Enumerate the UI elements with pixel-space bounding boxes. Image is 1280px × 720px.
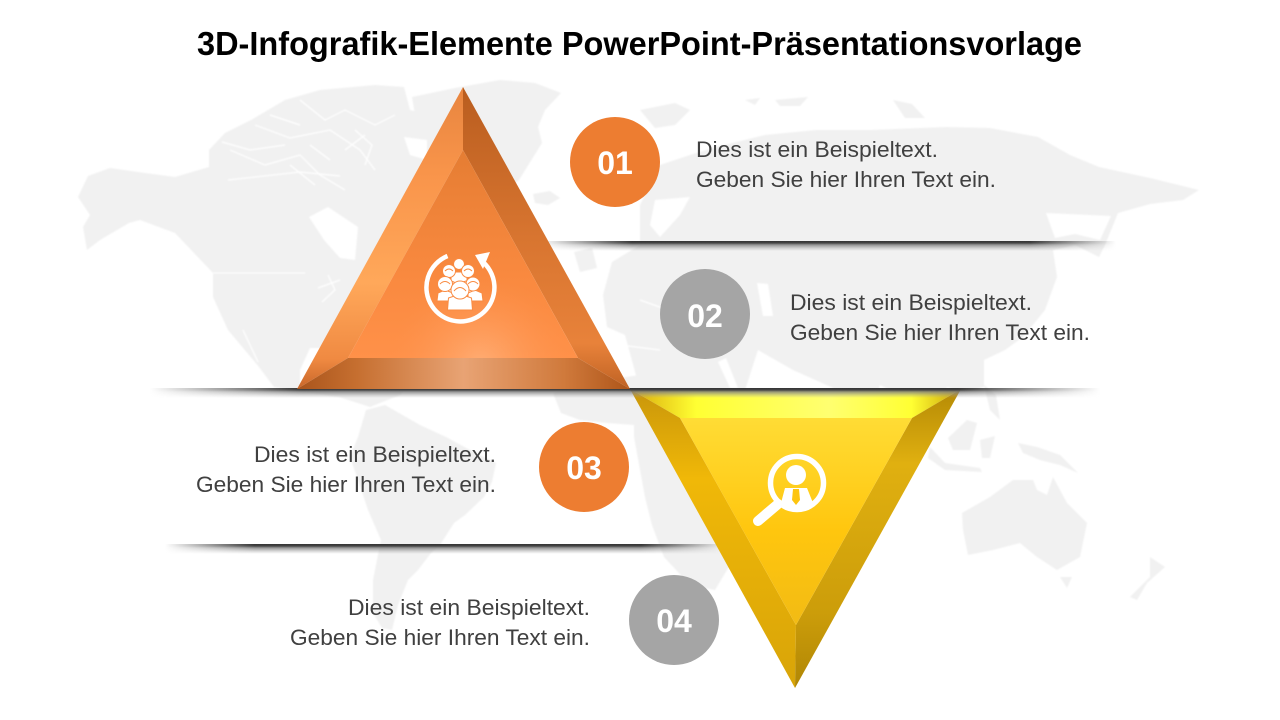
orange face: left bevel (297, 87, 463, 389)
number badge 02: 02 (687, 298, 723, 334)
map: water cut-outs (300, 137, 1111, 440)
item 02 text: Dies ist ein Beispieltext. (790, 290, 1032, 315)
shelf line 3 (165, 544, 725, 554)
item 03 text: Dies ist ein Beispieltext. (254, 442, 496, 467)
icon: magnifier with person (758, 456, 824, 521)
map: South America (350, 405, 496, 630)
map: Iceland and British Isles (533, 191, 597, 272)
icon: team with circular arrow (426, 252, 494, 321)
item 01 (570, 117, 996, 207)
map: Africa (553, 375, 780, 590)
item 04 text: Geben Sie hier Ihren Text ein. (290, 625, 590, 650)
number badge 01 (570, 117, 660, 207)
title: 3D-Infografik-Elemente PowerPoint-Präsentationsvorlage (197, 25, 1082, 62)
item 04 text (290, 595, 590, 650)
number badge 03: 03 (566, 450, 602, 486)
item 03 (196, 422, 629, 512)
yellow face: left bevel (630, 389, 796, 688)
number badge 03 (539, 422, 629, 512)
map: Eurasia (603, 127, 1199, 425)
item 04 (290, 575, 719, 665)
shelf line 1 (540, 241, 1116, 251)
item 03 text (196, 442, 496, 497)
orange face: bottom bevel (297, 358, 630, 389)
map: Arctic islands (640, 97, 925, 128)
item 01 text: Dies ist ein Beispieltext. (696, 137, 938, 162)
item 02 text: Geben Sie hier Ihren Text ein. (790, 320, 1090, 345)
yellow inverted 3D triangle (630, 389, 961, 688)
background world map (78, 80, 1199, 630)
yellow face: top bevel (630, 389, 961, 418)
orange face: right bevel (463, 87, 630, 389)
item 02 text (790, 290, 1090, 345)
number badge 01: 01 (597, 145, 633, 181)
yellow face: front (680, 418, 912, 625)
shelf line 2 (150, 388, 1100, 398)
map: North and Central America (78, 85, 480, 407)
item 04 text: Dies ist ein Beispieltext. (348, 595, 590, 620)
item 02 (660, 269, 1090, 359)
item 01 text: Geben Sie hier Ihren Text ein. (696, 167, 996, 192)
map: Australia (962, 477, 1087, 588)
map: Greenland (412, 80, 561, 195)
orange face: front (348, 150, 578, 358)
map: coastal channels (213, 100, 1066, 362)
item 01 text (696, 137, 996, 192)
map: Southeast Asian islands (928, 385, 1078, 473)
number badge 04 (629, 575, 719, 665)
number badge 04: 04 (656, 603, 692, 639)
orange 3D triangle (297, 87, 630, 389)
item 03 text: Geben Sie hier Ihren Text ein. (196, 472, 496, 497)
number badge 02 (660, 269, 750, 359)
map: New Zealand (1130, 557, 1165, 600)
yellow face: right bevel (795, 389, 961, 688)
